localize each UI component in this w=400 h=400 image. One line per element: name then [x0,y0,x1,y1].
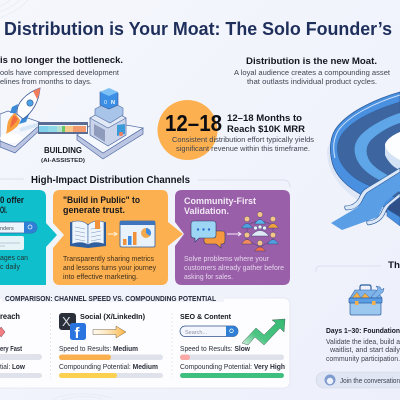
panel: community-first validation: Solve problems where your [184,256,270,263]
arrow [227,232,241,236]
stat callout: 12-18 months: Consistent distribution effort typically yields [172,137,315,144]
heading: the timeline: Th [388,260,400,271]
panel: build in public: "Build in Public" to [63,195,140,206]
column: social: Speed to Results: Medium [59,346,138,353]
icon: x logo: X [62,314,71,329]
panel: community-first validation: Community-First [184,196,257,207]
illustration: building platforms with rocket and server [0,88,143,164]
text block: building no longer the bottleneck: is no longer the bottleneck. [0,55,123,66]
icon: facebook logo: f [74,325,80,342]
ramp one [345,168,400,210]
column: seo and content [180,312,285,378]
panel: community-first validation: asking for sales. [184,274,233,281]
search bar: nders [0,226,14,232]
bridge with colored blocks [38,122,88,134]
text block: days 1-30 foundation: community participation. [326,356,400,363]
inner dark band [367,123,400,181]
result card [0,236,24,250]
column: reach: tial: Low [0,364,26,371]
panel: community-first validation: customers already gather before [184,265,284,272]
heading: comparison: COMPARISON: CHANNEL SPEED VS. COMPOUNDING POTENTIAL [5,296,217,303]
island [385,132,400,170]
panel: seo offer roi: ages can [0,255,28,262]
label: building ai-assisted: (AI-ASSISTED) [41,158,85,164]
icon: server tower: 0 [104,100,107,106]
panel: seo offer roi: OI. [0,205,7,216]
text block: days 1-30 foundation [326,328,400,363]
icon: open book [70,220,106,248]
title: Distribution is Your Moat: The Solo Founder’s [4,19,392,39]
icon: chat bubbles [191,221,225,248]
column: social: Compounding Potential: Medium [59,364,158,371]
arrow: medium speed [93,326,126,338]
icon: growth arrow [242,319,285,345]
outer wall [330,92,400,216]
column: social: Social (X/LinkedIn) [80,312,145,321]
right platform [77,120,143,159]
illustration: moat [327,92,400,230]
heading: the timeline [316,260,400,272]
pale road [331,172,400,230]
heading: high-impact distribution channels [0,175,290,187]
label: building ai-assisted [41,146,85,164]
stat callout: 12-18 months [158,100,315,160]
text block: days 1-30 foundation: Validate the idea, build a [326,339,400,346]
icon: rocket [6,88,40,134]
column: seo and content: Speed to Results: Slow [180,346,251,353]
text block: distribution is the new moat [234,56,390,86]
icon: chart window [120,221,155,247]
panel: build in public: and lessons turns your journey [63,265,156,272]
text block: building no longer the bottleneck [0,55,123,86]
label: building ai-assisted: BUILDING [44,146,82,155]
column: social [59,312,163,378]
panel: seo offer roi: 0 offer [0,195,24,206]
panel: comparison [0,294,290,388]
panel: seo offer roi: c daily [0,264,21,271]
light band [355,113,400,192]
text block: distribution is the new moat: Distribution is the new Moat. [246,56,377,67]
callout: join the conversation [316,372,400,388]
text block: days 1-30 foundation: waitlist, and start daily [329,347,400,354]
stat callout: 12-18 months: Reach $10K MRR [227,124,305,135]
panel: build in public: into effective marketing. [63,274,138,281]
panel: community-first validation [175,190,290,285]
stat callout: 12-18 months: 12–18 [165,110,222,136]
column: reach [0,312,42,378]
text block: distribution is the new moat: A loyal audience creates a compounding asset [234,70,390,77]
panel: community-first validation: Validation. [184,206,229,217]
stat callout: 12-18 months: significant revenue within this timeframe. [176,146,310,153]
icon: server tower [90,88,126,146]
stat callout: 12-18 months: 12–18 Months to [227,113,302,124]
arch under bridge [386,196,400,222]
left platform [0,111,42,153]
panel: build in public: generate trust. [63,205,125,216]
panel: build in public: Transparently sharing metrics [63,256,154,263]
column: reach: ery Fast [0,346,23,353]
icon: server tower: N [111,100,115,106]
dark water band [337,102,400,200]
panel: seo offer roi [0,190,57,285]
text block: building no longer the bottleneck: elines from months to days. [0,79,92,86]
arrow [108,232,117,236]
column: seo and content: SEO & Content [180,312,231,321]
column: reach: reach [0,312,20,321]
text block: building no longer the bottleneck: ools have compressed development [0,70,119,77]
search bar: Search... [185,330,207,336]
text block: distribution is the new moat: that outlasts individual product cycles. [247,79,377,86]
icon: people network [242,212,278,251]
ramp two [367,193,400,225]
heading: high-impact distribution channels: High-Impact Distribution Channels [31,175,190,186]
icon: toolbox [349,285,384,315]
panel: build in public [53,190,183,285]
column: seo and content: Compounding Potential: Very High [180,364,285,371]
soft shadow [327,110,400,226]
